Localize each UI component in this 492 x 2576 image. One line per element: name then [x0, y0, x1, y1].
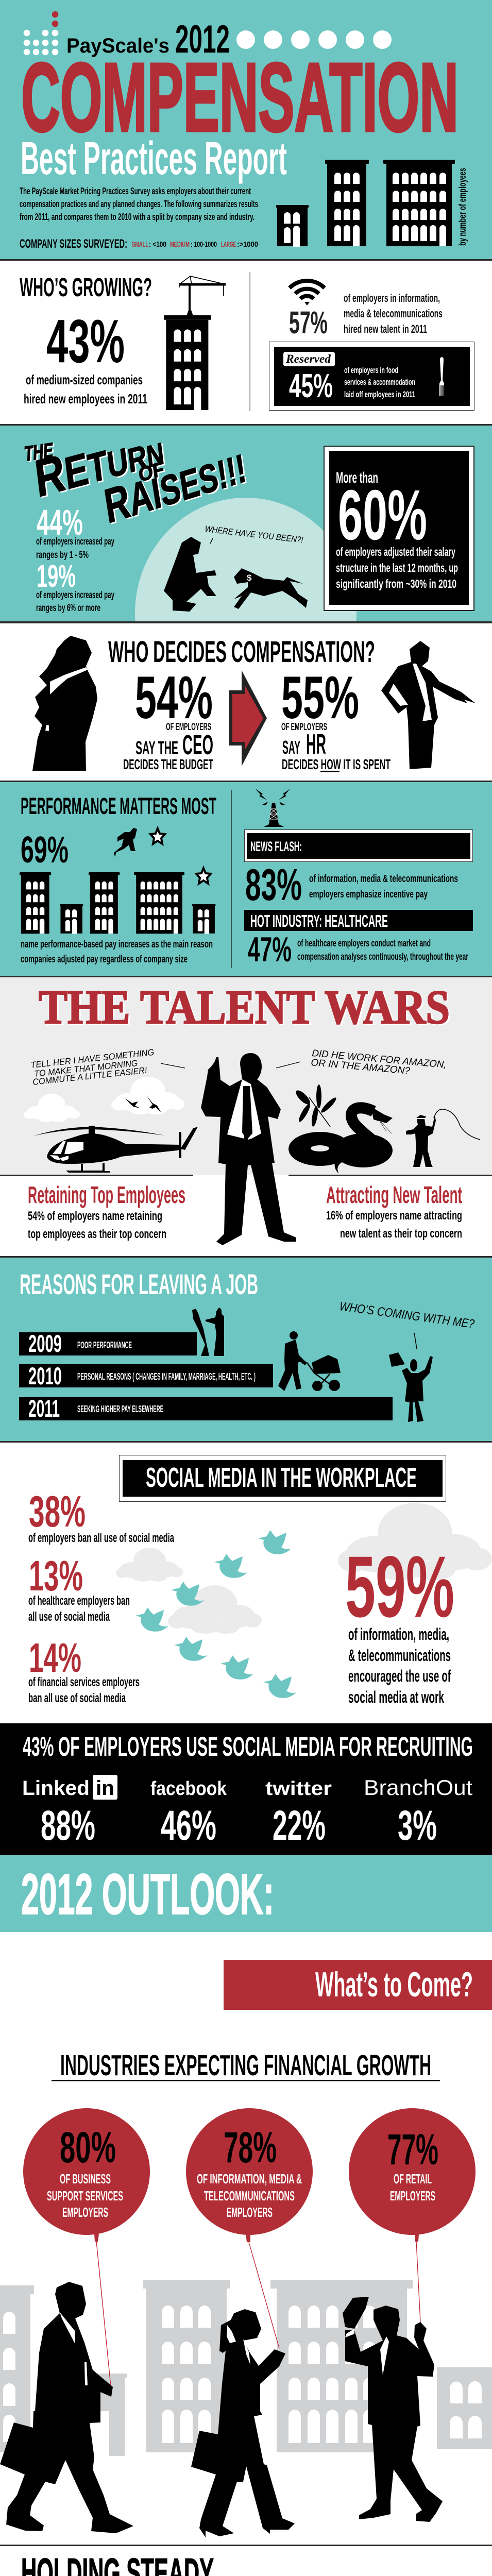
- heading: retaining: Retaining Top Employees: [28, 1181, 185, 1208]
- callout text: [336, 545, 458, 590]
- stat: 45%: 45%: [289, 367, 333, 404]
- panel: header: [0, 0, 492, 259]
- balloon strings: [96, 2241, 420, 2386]
- icon: dog with dollar collar: [234, 568, 308, 609]
- subtitle: Best Practices Report: [21, 133, 287, 184]
- bar: 2011: SEEKING HIGHER PAY ELSEWHERE: [77, 1404, 163, 1414]
- icon: runner: [114, 828, 137, 857]
- speech: where have you been: WHERE HAVE YOU BEEN?!: [205, 524, 304, 545]
- icon: man on phone: [201, 1053, 296, 1245]
- icon: birds: [125, 1095, 161, 1113]
- stat caption: HR: OF EMPLOYERS: [281, 722, 327, 733]
- heading: the return of raises: THE: [24, 438, 54, 466]
- icon: star: [196, 868, 211, 884]
- stat caption: of medium-sized companies: [26, 372, 143, 387]
- balloon: business support: EMPLOYERS: [62, 2205, 108, 2220]
- stat caption: HR: DECIDES HOW IT IS SPENT: [282, 756, 391, 772]
- bar: 2009: 2009: [28, 1330, 62, 1357]
- icon: businessman with briefcase: [0, 2282, 133, 2533]
- text: retaining: top employees as their top concern: [28, 1227, 166, 1241]
- panel: return of raises: [0, 426, 492, 621]
- icon: PayScale dots logo: [24, 11, 58, 55]
- text: retaining: [28, 1209, 166, 1241]
- balloon: retail: EMPLOYERS: [390, 2188, 435, 2204]
- balloon: business support: [23, 2108, 150, 2242]
- stat: 22%: 22%: [273, 1802, 326, 1849]
- stat: 83%: 83%: [245, 860, 302, 910]
- speech: helicopter: TO MAKE THAT MORNING: [33, 1058, 138, 1079]
- stat: 46%: 46%: [161, 1802, 216, 1849]
- stat: 47%: 47%: [248, 930, 292, 969]
- panel: performance matters most: [0, 782, 492, 976]
- stat: 60%: 60%: [338, 476, 427, 555]
- icon: businesswoman with briefcase: [191, 2309, 295, 2537]
- icon: large building: [383, 160, 455, 246]
- logo: LinkedIn: [22, 1775, 117, 1800]
- stat caption: [28, 1594, 130, 1624]
- stat caption: name performance-based pay increases as the main reason: [21, 939, 213, 950]
- balloon: business support: OF BUSINESS: [60, 2171, 111, 2187]
- balloon: information media telecommunications: TELECOMMUNICATIONS: [204, 2188, 295, 2204]
- icon: star: [150, 828, 165, 844]
- text: attracting: [326, 1209, 462, 1241]
- stat caption: ranges by 6% or more: [36, 603, 100, 614]
- heading: REASONS FOR LEAVING A JOB: [20, 1268, 258, 1300]
- stat caption: of financial services employers: [28, 1675, 140, 1689]
- brand name: PayScale's: [66, 35, 169, 57]
- icon: wifi: [290, 281, 325, 306]
- stat caption: companies adjusted pay regardless of company size: [21, 954, 188, 965]
- speech: helicopter: COMMUTE A LITTLE EASIER!: [32, 1065, 147, 1087]
- stat: 13%: 13%: [29, 1552, 83, 1600]
- panel: retaining and attracting: [28, 1181, 462, 1241]
- stat caption: [309, 873, 458, 900]
- speech: amazon: DID HE WORK FOR AMAZON,: [312, 1048, 447, 1071]
- bar: 2010: PERSONAL REASONS ( CHANGES IN FAMILY, MARRIAGE, HEALTH, ETC. ): [77, 1371, 256, 1382]
- stat caption: [36, 536, 114, 561]
- stat caption: [24, 372, 147, 406]
- logo: LinkedIn: in: [96, 1777, 114, 1800]
- heading: PERFORMANCE MATTERS MOST: [21, 793, 216, 819]
- company sizes legend: :>1000: [237, 240, 258, 249]
- stat caption: CEO: OF EMPLOYERS: [166, 722, 211, 733]
- callout: food services: [269, 342, 474, 410]
- bar: 2011: 2011: [28, 1395, 60, 1422]
- heading: the return of raises: OF: [138, 457, 165, 486]
- company sizes legend: MEDIUM: [170, 240, 190, 249]
- stat caption: ban all use of social media: [28, 1691, 126, 1705]
- bar: 2009: POOR PERFORMANCE: [77, 1340, 132, 1350]
- bar: 2009: [19, 1330, 197, 1357]
- bar: 2011: [19, 1395, 393, 1422]
- stat caption: of employers in food: [344, 365, 398, 375]
- panel: 2012 outlook: [0, 1855, 492, 1932]
- stat caption: CEO: SAY THE: [135, 737, 178, 758]
- panel: who decides compensation: [32, 635, 476, 772]
- heading: WHO’S GROWING?: [20, 273, 152, 302]
- panel: social recruiting: [0, 1723, 492, 1855]
- stat: 88%: 88%: [41, 1802, 95, 1849]
- stat caption: of healthcare employers ban: [28, 1594, 130, 1608]
- stat caption: [21, 939, 213, 965]
- logo: twitter: twitter: [265, 1778, 332, 1800]
- heading box: [120, 1455, 446, 1501]
- company sizes legend: : <100: [149, 240, 166, 249]
- icon: man thinking: [32, 636, 97, 771]
- speech: helicopter: [30, 1047, 155, 1087]
- intro text: The PayScale Market Pricing Practices Survey asks employers about their current: [20, 185, 251, 196]
- background city buildings: [0, 2280, 492, 2456]
- stat caption: employers emphasize incentive pay: [309, 889, 428, 900]
- balloon: retail: 77%: [387, 2125, 438, 2174]
- logo: LinkedIn: Linked: [22, 1777, 90, 1800]
- stat caption: of employers in information,: [344, 292, 440, 304]
- intro text: from 2011, and compares them to 2010 with a split by company size and industry.: [20, 211, 255, 222]
- stat: 3%: 3%: [398, 1802, 437, 1849]
- speech: amazon: OR IN THE AMAZON?: [311, 1057, 411, 1077]
- text: retaining: 54% of employers name retaining: [28, 1209, 162, 1223]
- stat caption: all use of social media: [28, 1609, 110, 1624]
- bar: 2010: [19, 1362, 273, 1389]
- company sizes legend: : 100-1000: [191, 240, 217, 249]
- arrow: [229, 670, 267, 766]
- logo: facebook: facebook: [150, 1778, 227, 1800]
- panel: who's growing: [20, 272, 474, 411]
- balloon: information media telecommunications: EMPLOYERS: [227, 2205, 273, 2220]
- clouds: [116, 1503, 492, 1634]
- stat caption: ranges by 1 - 5%: [36, 550, 89, 561]
- callout: 60%: [324, 446, 474, 611]
- icon: fork: [439, 357, 444, 396]
- company sizes legend: COMPANY SIZES SURVEYED:: [20, 237, 127, 251]
- intro text: [20, 185, 258, 222]
- icon: snake: [289, 1107, 393, 1174]
- speech: helicopter: TELL HER I HAVE SOMETHING: [30, 1047, 155, 1070]
- heading: the return of raises: RAISES!!!: [101, 438, 249, 534]
- banner: what's to come: [224, 1960, 492, 2010]
- icon: small building: [276, 205, 309, 247]
- icon: explorer with whip: [406, 1109, 480, 1167]
- stat caption: of employers increased pay: [36, 590, 114, 601]
- logo: BranchOut: BranchOut: [364, 1775, 472, 1800]
- icon: radio tower: [256, 789, 290, 827]
- icon: medium building: [325, 160, 369, 246]
- icon: tall building: [164, 315, 211, 410]
- stat caption: HR: [281, 722, 391, 772]
- balloon: business support: SUPPORT SERVICES: [47, 2188, 123, 2204]
- company sizes legend: LARGE: [221, 240, 236, 249]
- bar: 2010: 2010: [28, 1362, 62, 1389]
- stat caption: HR: SAY: [282, 737, 300, 758]
- heading: THE TALENT WARS: [39, 981, 450, 1034]
- decorative white dots: [236, 30, 392, 49]
- icon: twitter birds: [135, 1530, 296, 1698]
- callout: news flash: [244, 829, 473, 861]
- panel: reasons for leaving a job: [0, 1258, 492, 1441]
- intro text: compensation practices and any planned changes. The following summarizes results: [20, 198, 258, 209]
- stat caption: hired new talent in 2011: [344, 323, 427, 335]
- icon: dog with dollar collar: $: [247, 573, 252, 583]
- callout: 60%: More than: [336, 469, 378, 486]
- stat: 69%: 69%: [21, 829, 69, 871]
- stat caption: CEO: [123, 722, 213, 772]
- icon: crouching person: [164, 537, 216, 612]
- stat: 14%: 14%: [29, 1635, 81, 1681]
- panel: social media in the workplace: [28, 1455, 492, 1706]
- stat: 55%: 55%: [281, 664, 359, 731]
- stat: 38%: 38%: [29, 1487, 86, 1536]
- stat caption: [344, 365, 415, 399]
- stat caption: [348, 1625, 451, 1706]
- spotlight circle: [135, 498, 357, 621]
- company sizes legend: SMALL: [132, 240, 148, 249]
- stat: 44%: 44%: [37, 502, 83, 543]
- stat caption: CEO: CEO: [182, 730, 213, 760]
- balloon: information media telecommunications: [186, 2108, 313, 2242]
- icon: two men: [192, 1308, 224, 1356]
- icon: businessman waving hat: [343, 2297, 443, 2522]
- stat caption: [28, 1675, 140, 1705]
- stat: 57%: 57%: [289, 305, 328, 340]
- balloon: retail: OF RETAIL: [394, 2171, 432, 2187]
- stat caption: hired new employees in 2011: [24, 391, 147, 406]
- icon: row of buildings: [20, 872, 215, 934]
- balloon: retail: [349, 2108, 476, 2242]
- stat: 43%: 43%: [46, 307, 125, 376]
- stat caption: of employers ban all use of social media: [28, 1531, 175, 1545]
- icon: crane: [179, 276, 226, 315]
- heading: 2012 OUTLOOK:: [21, 1862, 274, 1926]
- stat caption: services & accommodation: [344, 377, 415, 387]
- stat caption: [297, 938, 468, 962]
- stat caption: CEO: DECIDES THE BUDGET: [123, 756, 213, 772]
- balloon: information media telecommunications: OF INFORMATION, MEDIA &: [197, 2171, 302, 2187]
- stat caption: HR: HR: [306, 728, 326, 760]
- year: 2012: [175, 18, 230, 61]
- icon: woman with briefcase: [389, 1352, 433, 1422]
- stat: 54%: 54%: [135, 664, 213, 731]
- heading: the return of raises: RETURN: [32, 417, 166, 509]
- icon: reserved sign: Reserved: [285, 352, 331, 365]
- axis label: by number of employees: [457, 168, 468, 246]
- panel: talent wars: [0, 977, 492, 1245]
- icon: woman pointing: [381, 641, 476, 769]
- stat: 19%: 19%: [37, 558, 76, 594]
- stat caption: of employers increased pay: [36, 536, 114, 547]
- callout: news flash: NEWS FLASH:: [250, 839, 302, 854]
- clouds: [24, 1077, 184, 1122]
- stat caption: [36, 590, 114, 614]
- icon: helicopter: [33, 1126, 198, 1173]
- icon: man with stroller: [278, 1331, 341, 1391]
- heading: the return of raises: [24, 417, 249, 534]
- stat caption: [344, 292, 443, 335]
- stat caption: laid off employees in 2011: [344, 389, 415, 399]
- balloon: information media telecommunications: 78%: [224, 2123, 277, 2172]
- icon: leaves: [294, 1084, 338, 1127]
- balloon: business support: 80%: [60, 2123, 116, 2172]
